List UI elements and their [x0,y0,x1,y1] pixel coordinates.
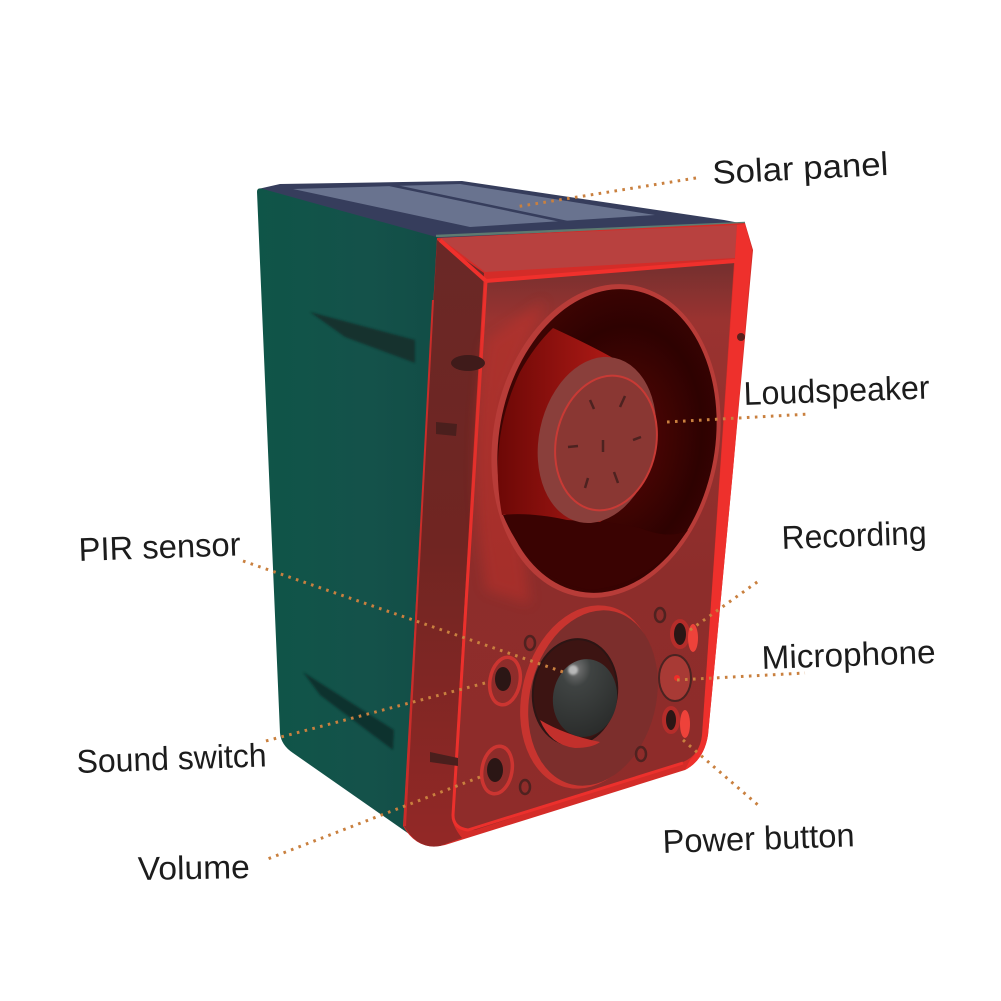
label: recording: Recording [781,514,927,556]
cover top bevel [440,225,737,272]
leader line: recording [690,580,760,630]
green side housing [257,188,440,836]
power button [664,708,690,738]
label: solar panel: Solar panel [711,145,889,191]
speaker cylinder body [498,328,650,522]
leader line: loudspeaker [667,414,810,422]
device illustration [257,181,753,847]
volume knob [478,744,516,796]
label: microphone: Microphone [761,633,936,676]
label: loudspeaker: Loudspeaker [743,369,930,412]
side slot upper [310,312,415,363]
label: power button: Power button [662,816,855,860]
cover right bevel [685,224,752,770]
label: volume: Volume [137,848,250,887]
red front cover [403,223,753,847]
inner front face [453,263,734,830]
side slot lower [303,672,394,750]
glow around horn [476,300,545,604]
side clips [451,355,485,371]
solar panel top [258,181,745,240]
speaker cap [523,346,671,534]
leader line: microphone [677,673,805,680]
leader line: solar panel [515,178,696,207]
PIR sensor [501,591,676,803]
leader line: sound switch [262,683,485,742]
recording button [672,621,698,652]
loudspeaker horn [467,266,745,616]
small screws [520,608,665,794]
label: PIR sensor: PIR sensor [78,525,241,568]
sound switch knob [486,655,524,707]
leader line: volume [265,777,480,860]
cover side bevel [404,240,484,847]
horn lower reflection [503,515,688,590]
leader line: PIR sensor [243,561,566,673]
leader line: power button [683,740,758,805]
microphone [659,655,691,701]
label: sound switch: Sound switch [76,736,267,780]
